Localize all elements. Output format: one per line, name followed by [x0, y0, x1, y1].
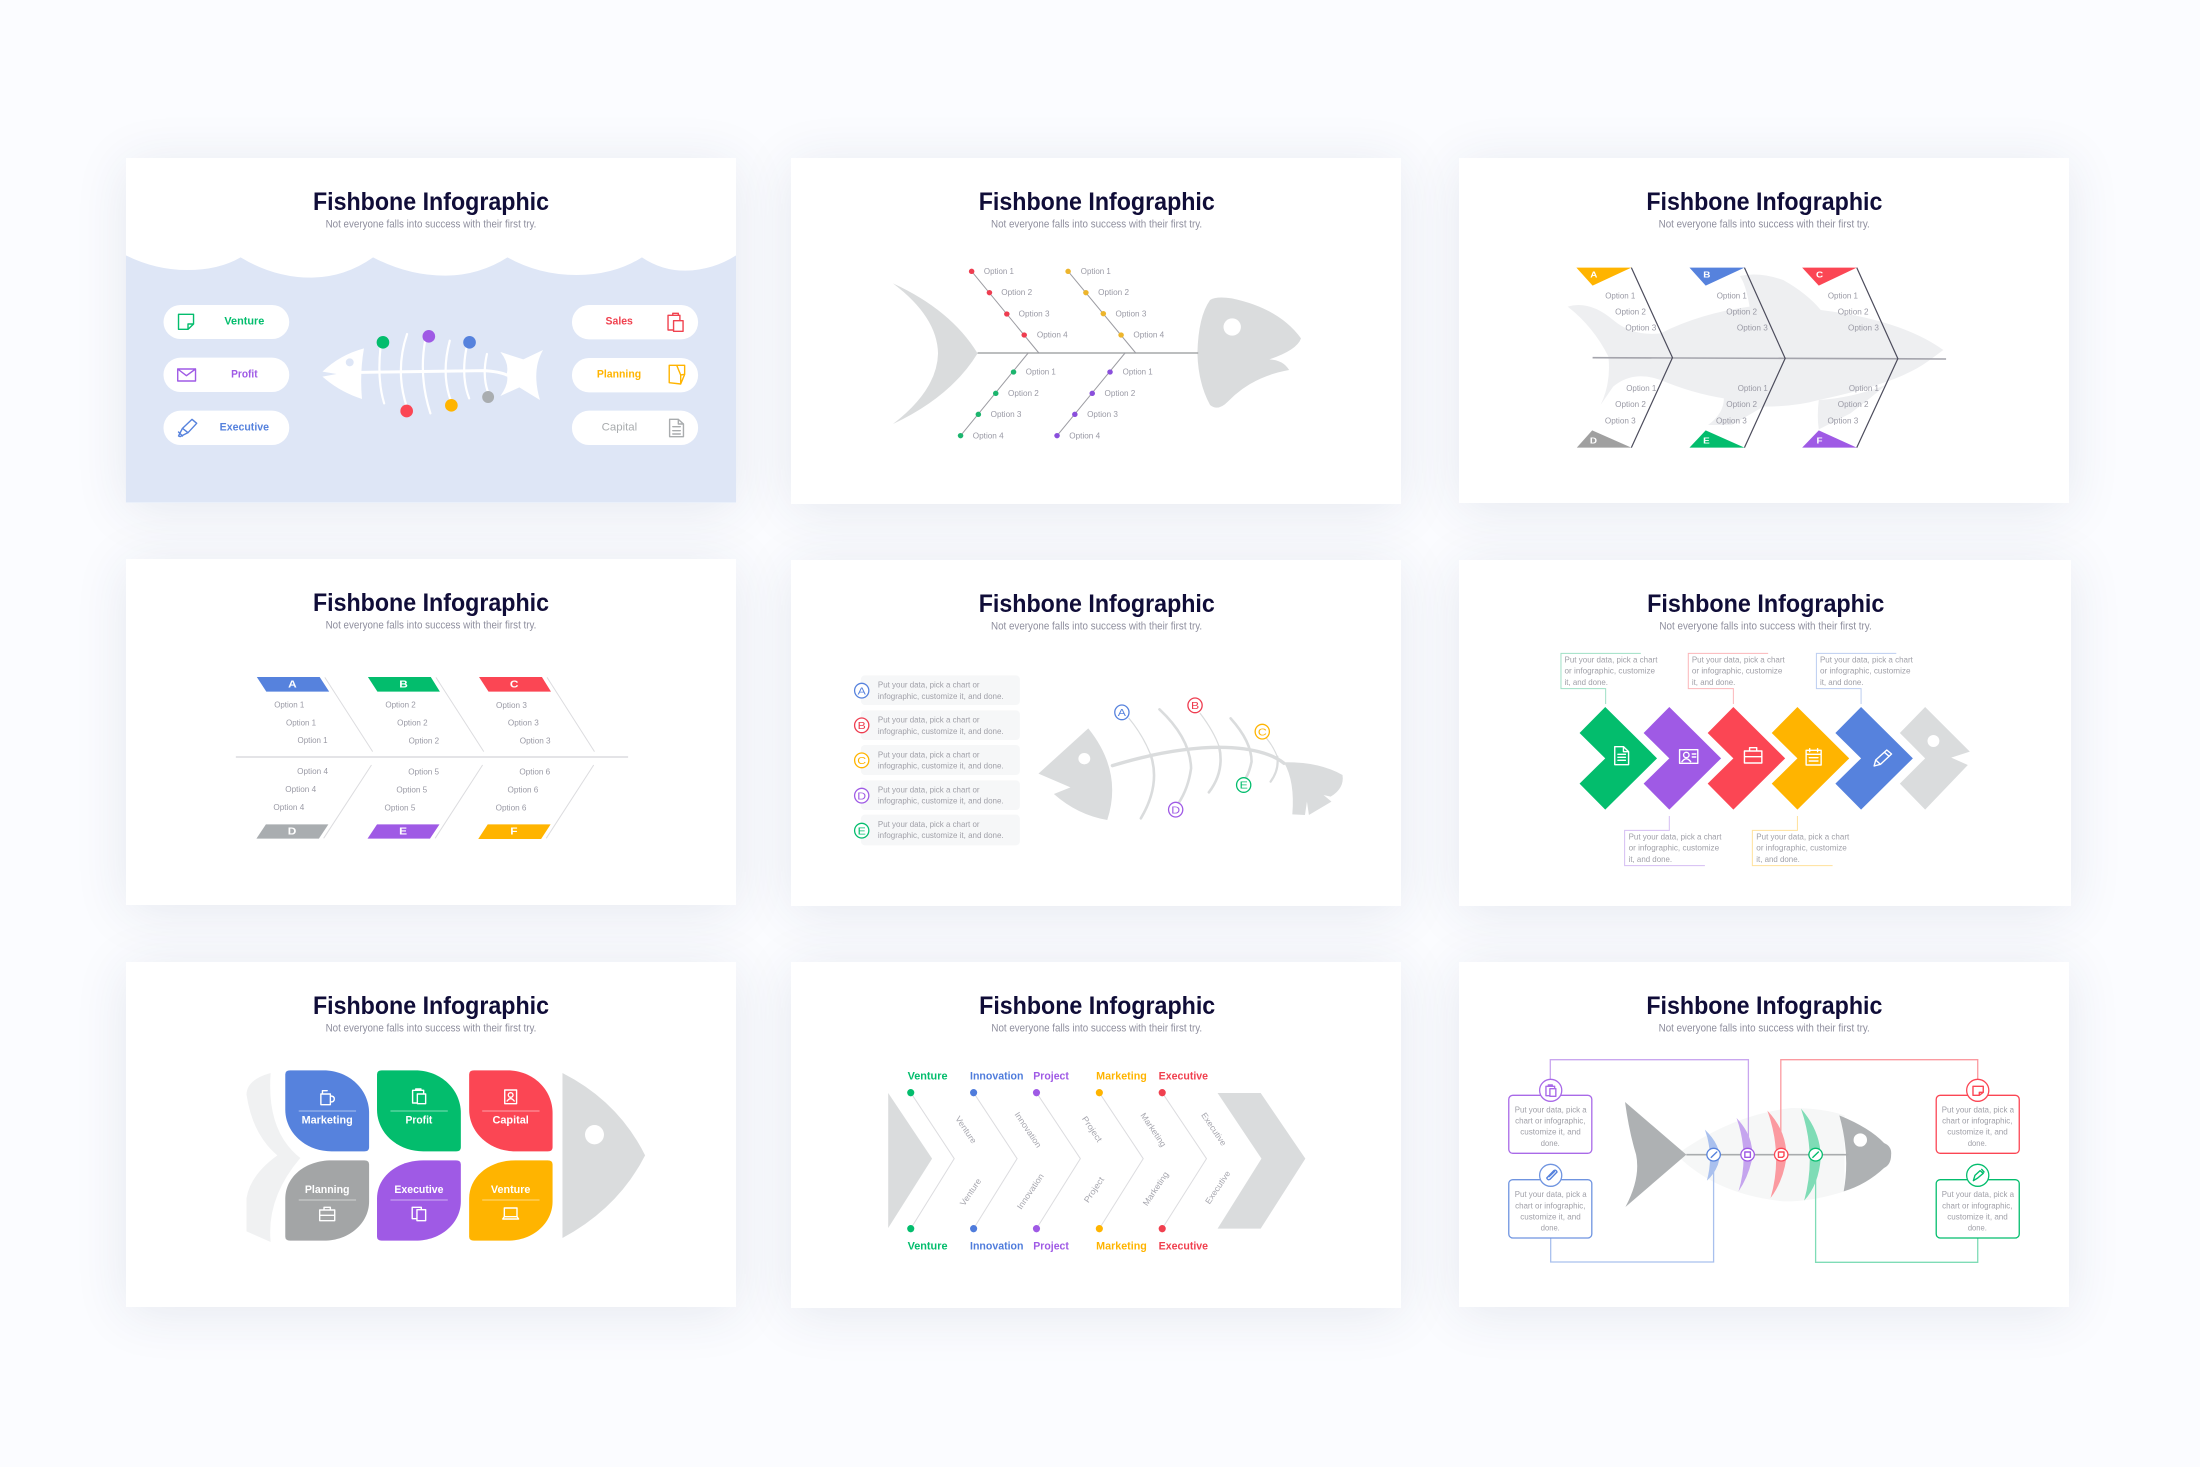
rotated labels: Innovation: [1015, 1171, 1046, 1211]
panel: leaf grid fish: [126, 962, 736, 1307]
leaf: Profit: [377, 1070, 461, 1151]
column: Executive: Executive: [1159, 1240, 1208, 1252]
chevron: green document: [1580, 707, 1657, 810]
option labels: Option 1: [1026, 367, 1056, 376]
list item E: infographic, customize it, and done.: [878, 831, 1004, 840]
option labels: Option 3: [496, 701, 527, 710]
text box: green: customize it, and: [1947, 1212, 2008, 1221]
flag D: D: [288, 826, 296, 837]
pill: Executive: [163, 411, 289, 445]
flag F: F: [1817, 436, 1823, 445]
spine nodes: [1707, 1148, 1822, 1161]
flag E: E: [399, 826, 407, 837]
flag D: [256, 824, 328, 839]
title block: Fishbone Infographic: [313, 187, 549, 215]
skeleton fish: [1038, 709, 1343, 820]
option labels: Option 4: [1037, 330, 1068, 339]
leaf: Venture: Venture: [491, 1183, 531, 1196]
option labels: [973, 267, 1164, 440]
pill: Venture: [163, 305, 289, 339]
title block: Fishbone Infographic: [313, 991, 549, 1019]
callout: blue: Put your data, pick a chart: [1820, 655, 1913, 664]
pill: Capital: [572, 411, 698, 445]
text box: green: [1936, 1164, 2019, 1238]
title block: Fishbone Infographic: [979, 991, 1215, 1019]
title block: Fishbone Infographic: [979, 187, 1215, 215]
rotated labels: Marketing: [1140, 1169, 1171, 1208]
list item B: Put your data, pick a chart or: [878, 715, 980, 724]
column: Venture: Venture: [908, 1240, 948, 1252]
leaf: Venture: [469, 1160, 553, 1241]
list item B: infographic, customize it, and done.: [878, 727, 1004, 736]
option labels: Option 4: [1133, 330, 1164, 339]
leaf: Planning: Planning: [305, 1183, 350, 1196]
option labels: Option 5: [396, 785, 427, 794]
marker A: [1115, 705, 1129, 720]
title block: Fishbone Infographic: [313, 588, 549, 616]
marker C: C: [1258, 727, 1267, 738]
option labels: Option 3: [1827, 416, 1858, 425]
title block: [1647, 589, 1884, 632]
column: Venture: Venture: [908, 1070, 948, 1082]
text box: purple: [1509, 1079, 1592, 1153]
shark silhouette: [1568, 275, 1943, 429]
list item D: infographic, customize it, and done.: [878, 796, 1004, 805]
option labels: Option 4: [285, 785, 316, 794]
title block: Not everyone falls into success with their first try.: [1659, 217, 1870, 230]
wave background: [126, 255, 736, 503]
option labels: Option 1: [274, 700, 304, 709]
list item C: C: [857, 756, 866, 767]
purple branch: [1054, 369, 1113, 438]
callout: purple: Put your data, pick a chart: [1629, 832, 1722, 841]
callout: green: it, and done.: [1565, 678, 1608, 687]
flag B: B: [1703, 270, 1711, 279]
option labels: Option 2: [385, 700, 416, 709]
flag F: [478, 824, 551, 839]
rotated labels: Project: [1080, 1114, 1105, 1144]
option labels: Option 1: [984, 267, 1014, 276]
rotated labels: Venture: [958, 1176, 983, 1208]
option labels: Option 3: [1716, 416, 1747, 425]
callout: green: or infographic, customize: [1565, 666, 1655, 675]
red branch: [969, 269, 1027, 338]
flag C: [1802, 268, 1857, 286]
title block: [313, 187, 549, 230]
text box: blue: done.: [1541, 1223, 1560, 1232]
option labels: [273, 700, 551, 812]
title block: Not everyone falls into success with their first try.: [326, 618, 536, 631]
title block: Fishbone Infographic: [979, 589, 1215, 617]
option labels: Option 1: [1626, 384, 1656, 393]
option labels: Option 2: [1001, 288, 1032, 297]
leaf: Executive: [377, 1160, 461, 1241]
panel: fish with connected text boxes: [1459, 962, 2069, 1307]
right arrow head: [1218, 1093, 1305, 1229]
column: Project: Project: [1033, 1070, 1069, 1082]
text box: red: done.: [1968, 1139, 1987, 1148]
option labels: Option 4: [273, 803, 304, 812]
text box: purple: chart or infographic,: [1515, 1116, 1585, 1125]
flag A: A: [288, 679, 297, 690]
option labels: Option 3: [1605, 416, 1636, 425]
fish tail: [1625, 1102, 1686, 1207]
column: Innovation: Innovation: [970, 1240, 1023, 1252]
fish skeleton with coloured dots: [322, 330, 543, 417]
option labels: Option 2: [1726, 400, 1757, 409]
option labels: Option 5: [385, 803, 415, 812]
list item A: Put your data, pick a chart or: [878, 680, 980, 689]
title block: Fishbone Infographic: [1647, 589, 1884, 617]
callout: blue: [1816, 653, 1913, 704]
leaf: Planning: [285, 1160, 369, 1241]
pill: Planning: [572, 358, 698, 392]
rotated labels: Executive: [1199, 1110, 1229, 1148]
callout: green: [1561, 653, 1658, 704]
text box: purple: Put your data, pick a: [1515, 1105, 1587, 1114]
option labels: Option 1: [1849, 384, 1879, 393]
option labels: Option 2: [1104, 389, 1135, 398]
panel: chevron chain fish: [1459, 560, 2071, 906]
option labels: Option 1: [1123, 367, 1153, 376]
text box: blue: [1509, 1164, 1592, 1238]
text box: red: customize it, and: [1947, 1127, 2008, 1136]
left arrow tail: [888, 1093, 932, 1228]
chevron: yellow calendar: [1772, 707, 1849, 810]
fish tail: [247, 1073, 300, 1242]
marker E: [1237, 778, 1251, 792]
option labels: Option 3: [1019, 309, 1050, 318]
fish head: [1197, 297, 1301, 408]
option labels: Option 3: [1625, 323, 1656, 332]
list item B: B: [858, 721, 866, 732]
list item B: [855, 710, 1020, 740]
leaf: Capital: Capital: [492, 1114, 529, 1126]
option labels: Option 1: [1738, 384, 1768, 393]
text box: green: chart or infographic,: [1942, 1201, 2013, 1210]
title block: [1646, 187, 1882, 230]
leaf: Marketing: Marketing: [302, 1114, 353, 1126]
flag C: [479, 677, 551, 692]
rotated labels: Project: [1082, 1174, 1106, 1204]
spine: [1593, 358, 1946, 359]
chevron lines: [911, 1093, 1207, 1229]
option labels: Option 2: [397, 718, 428, 727]
column: Marketing: Marketing: [1096, 1240, 1147, 1252]
marker C: [1255, 724, 1269, 739]
panel: chevron lines between arrow tail and head: [791, 962, 1401, 1308]
flag D: D: [1590, 436, 1597, 445]
rotated labels: Innovation: [1013, 1110, 1044, 1150]
leaf: Marketing: [285, 1070, 369, 1151]
pill: Profit: [163, 358, 289, 392]
title block: [313, 588, 549, 631]
callout: yellow: [1752, 816, 1850, 866]
flag F: [1802, 430, 1857, 448]
column: Innovation: [970, 1070, 1023, 1252]
flag D: [1577, 430, 1631, 448]
text box: red: [1936, 1079, 2019, 1153]
list item C: Put your data, pick a chart or: [878, 750, 980, 759]
option labels: Option 1: [298, 736, 328, 745]
option labels: Option 3: [1087, 410, 1118, 419]
flag B: [1689, 268, 1744, 286]
list item E: E: [858, 826, 866, 837]
callout: purple: it, and done.: [1629, 855, 1672, 864]
title block: Not everyone falls into success with their first try.: [1659, 1021, 1870, 1034]
title block: Not everyone falls into success with their first try.: [1659, 620, 1872, 632]
text box: purple: customize it, and: [1520, 1127, 1581, 1136]
column: Executive: [1159, 1070, 1208, 1252]
option labels: Option 2: [1098, 288, 1129, 297]
callout: yellow: Put your data, pick a chart: [1756, 832, 1850, 841]
fish head: [562, 1073, 645, 1238]
chevron bones: [1631, 268, 1898, 448]
callout: green: Put your data, pick a chart: [1565, 655, 1658, 664]
option labels: Option 4: [297, 767, 328, 776]
flag B: B: [399, 679, 408, 690]
list item E: [855, 815, 1020, 845]
option labels: Option 2: [1615, 400, 1646, 409]
text box: purple: done.: [1541, 1139, 1560, 1148]
flag E: [1689, 430, 1744, 448]
column: Project: Project: [1033, 1240, 1069, 1252]
option labels: Option 2: [1615, 307, 1646, 316]
callout: red: or infographic, customize: [1692, 666, 1782, 675]
option labels: Option 2: [1838, 400, 1869, 409]
marker B: [1188, 698, 1202, 713]
title block: Fishbone Infographic: [1646, 187, 1882, 215]
marker E: E: [1240, 780, 1248, 791]
flag A: [1576, 268, 1631, 286]
option labels: Option 2: [409, 736, 439, 745]
option labels: Option 6: [508, 785, 538, 794]
title block: Not everyone falls into success with their first try.: [326, 1021, 536, 1034]
fish body: [1676, 1108, 1844, 1201]
option labels: Option 3: [1116, 309, 1146, 318]
column: Venture: [907, 1070, 948, 1252]
flag E: E: [1703, 436, 1710, 445]
option labels: Option 2: [1726, 307, 1757, 316]
title block: [979, 991, 1215, 1034]
list item A: A: [858, 686, 866, 697]
option labels: Option 3: [1848, 323, 1879, 332]
option labels: Option 1: [286, 718, 316, 727]
flag F: F: [510, 826, 518, 837]
pill: Executive: Executive: [220, 421, 269, 433]
list item C: infographic, customize it, and done.: [878, 761, 1004, 770]
title block: [979, 187, 1215, 230]
callout: purple: or infographic, customize: [1629, 843, 1719, 852]
callout: blue: or infographic, customize: [1820, 666, 1911, 675]
fish tail: [893, 283, 978, 424]
flag A: A: [1590, 270, 1598, 279]
option labels: Option 2: [1008, 389, 1039, 398]
marker B: B: [1191, 701, 1199, 712]
list item E: Put your data, pick a chart or: [878, 820, 980, 829]
title block: [979, 589, 1215, 632]
list item D: Put your data, pick a chart or: [878, 785, 980, 794]
flag C: C: [1816, 270, 1824, 279]
pill: Sales: Sales: [606, 315, 633, 327]
callout: red: Put your data, pick a chart: [1692, 655, 1785, 664]
option labels: Option 3: [991, 410, 1021, 419]
pill: Venture: Venture: [224, 315, 264, 327]
text box: red: chart or infographic,: [1942, 1116, 2013, 1125]
list item D: D: [857, 791, 866, 802]
leaf: Executive: Executive: [394, 1183, 444, 1196]
title block: Not everyone falls into success with their first try.: [326, 217, 536, 230]
callout: yellow: or infographic, customize: [1756, 843, 1847, 852]
title block: Not everyone falls into success with their first try.: [991, 620, 1202, 632]
fish head: [1900, 707, 1970, 810]
title block: Fishbone Infographic: [1646, 991, 1882, 1019]
flag E: [368, 824, 439, 839]
option labels: Option 6: [519, 767, 550, 776]
panel: shark with chevron flags: [1459, 158, 2069, 503]
rotated labels: Venture: [953, 1114, 979, 1146]
pill: Planning: Planning: [597, 368, 641, 380]
text box: green: done.: [1968, 1223, 1987, 1232]
title block: Not everyone falls into success with their first try.: [991, 1021, 1202, 1034]
text box: red: Put your data, pick a: [1942, 1105, 2015, 1114]
pill: Capital: Capital: [602, 421, 637, 433]
option labels: Option 4: [973, 431, 1004, 440]
title block: [1646, 991, 1882, 1034]
leaf: Profit: Profit: [405, 1114, 432, 1126]
chevron: blue pencil: [1835, 707, 1913, 810]
chevron: red briefcase: [1708, 707, 1785, 810]
option labels: Option 5: [408, 767, 439, 776]
flag A: [257, 677, 329, 692]
option labels: Option 4: [1069, 431, 1100, 440]
panel: skeleton fish with lettered list: [791, 560, 1401, 906]
column: Project: [1033, 1070, 1069, 1252]
coloured fish bands: [1705, 1109, 1821, 1201]
pill: Profit: Profit: [231, 368, 258, 380]
column: Executive: Executive: [1159, 1070, 1208, 1082]
list item A: infographic, customize it, and done.: [878, 692, 1004, 701]
rotated labels: [953, 1110, 1233, 1211]
fish head: [1839, 1115, 1891, 1191]
list item C: [855, 745, 1020, 775]
callout: blue: it, and done.: [1820, 678, 1863, 687]
spine and bones: [961, 271, 1198, 436]
connector lines: [1550, 1060, 1978, 1262]
spine and bones: [236, 677, 628, 838]
pill: Sales: [572, 305, 698, 339]
text box: blue: customize it, and: [1520, 1212, 1581, 1221]
option labels: Option 1: [1717, 291, 1747, 300]
callout: yellow: it, and done.: [1756, 855, 1800, 864]
column: Marketing: Marketing: [1096, 1070, 1147, 1082]
option labels: Option 2: [1838, 307, 1869, 316]
spine: [1686, 1154, 1848, 1156]
column: Marketing: [1096, 1070, 1147, 1252]
text box: blue: chart or infographic,: [1515, 1201, 1585, 1210]
list item A: [855, 675, 1020, 705]
callout: red: it, and done.: [1692, 678, 1735, 687]
callout: purple: [1625, 816, 1722, 866]
yellow branch: [1065, 269, 1124, 338]
title block: [313, 991, 549, 1034]
marker A: A: [1118, 708, 1126, 719]
rotated labels: Marketing: [1138, 1111, 1169, 1149]
option labels: [1605, 291, 1879, 425]
marker D: [1169, 802, 1183, 817]
leaf: Capital: [469, 1070, 553, 1151]
list item D: [855, 780, 1020, 810]
option labels: Option 6: [496, 803, 526, 812]
callout: red: [1688, 653, 1785, 704]
option labels: Option 1: [1081, 267, 1111, 276]
option labels: Option 3: [520, 736, 551, 745]
panel: classic fishbone with options: [791, 158, 1401, 504]
text box: green: Put your data, pick a: [1942, 1190, 2015, 1199]
rotated labels: Executive: [1203, 1168, 1233, 1206]
option labels: Option 1: [1605, 291, 1635, 300]
text box: blue: Put your data, pick a: [1515, 1190, 1587, 1199]
panel: ocean fish with pills: [126, 158, 736, 503]
column: Innovation: Innovation: [970, 1070, 1023, 1082]
panel: parallelogram flags fishbone: [126, 559, 736, 905]
chevron: purple id card: [1644, 707, 1721, 810]
marker D: D: [1171, 805, 1180, 816]
option labels: Option 3: [1737, 323, 1768, 332]
title block: Not everyone falls into success with their first try.: [991, 218, 1202, 230]
green branch: [958, 369, 1016, 438]
flag C: C: [510, 679, 519, 690]
flag B: [368, 677, 440, 692]
option labels: Option 3: [508, 718, 539, 727]
option labels: Option 1: [1828, 291, 1858, 300]
